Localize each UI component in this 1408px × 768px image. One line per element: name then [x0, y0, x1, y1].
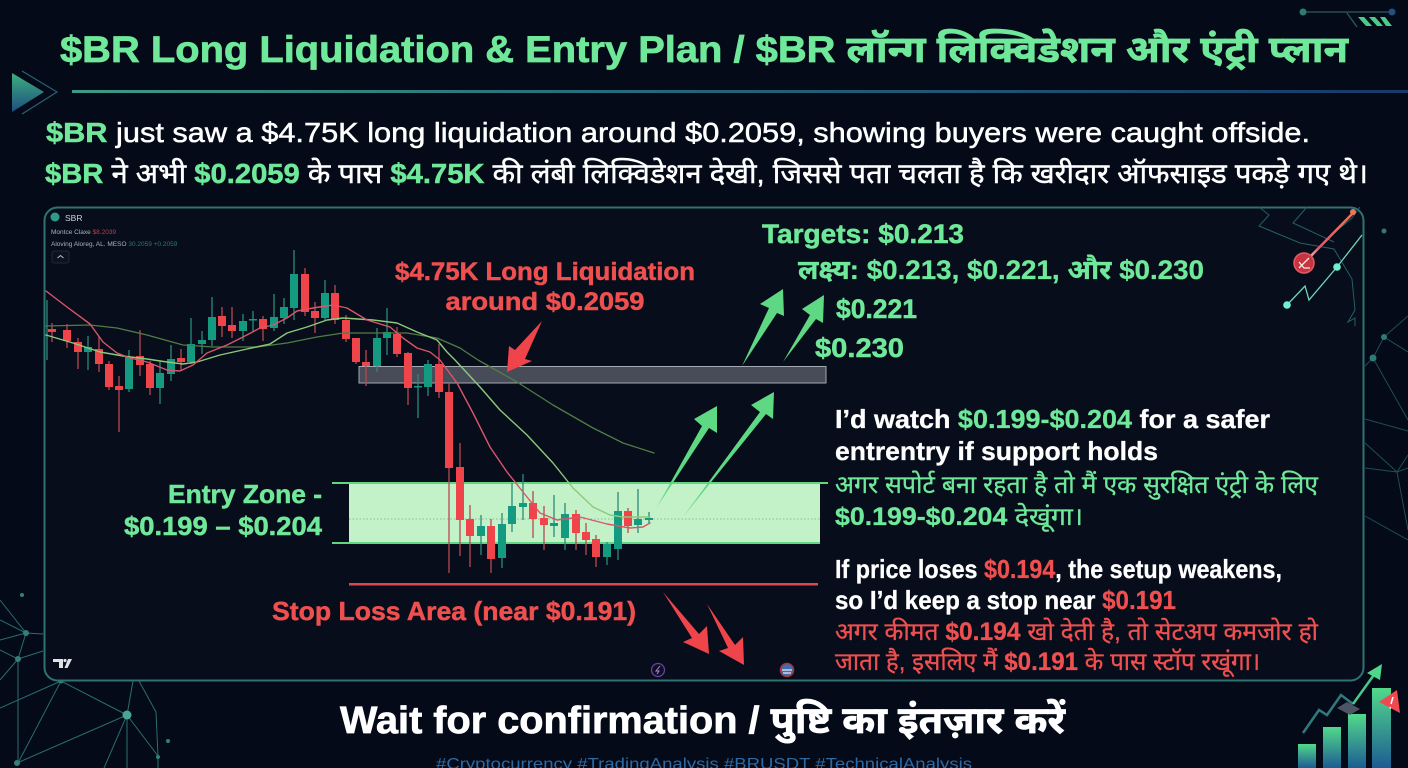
- text block: entry plan: $0.199-$0.204 देखूंगा।: [835, 501, 1083, 532]
- panel: chart: [44, 207, 1364, 680]
- intro text English: $BR just saw a $4.75K long liquidation around $0.2059, showing buyers were caught offside.: [46, 117, 1310, 148]
- moving average lines: [46, 291, 654, 528]
- icon: growth bars: [1298, 664, 1400, 768]
- intro text Hindi: $BR ने अभी $0.2059 के पास $4.75K की लंबी लिक्विडेशन देखी, जिससे पता चलता है कि खरीदार ऑफसाइड पकड़े गए थे।: [45, 157, 1368, 189]
- label: stop loss: Stop Loss Area (near $0.191): [272, 596, 636, 626]
- footer callout: Wait for confirmation / पुष्टि का इंतज़ार करें: [340, 698, 1066, 744]
- label: targets: [762, 219, 1204, 363]
- header decoration top right: [1300, 8, 1396, 27]
- background network bottom left: [0, 593, 170, 768]
- label: targets: $0.221: [836, 294, 917, 324]
- icon: panel corner signal: [1283, 209, 1362, 309]
- icon: flag badge: [780, 664, 794, 676]
- header decoration left triangles: [12, 71, 57, 114]
- arrows: upper target arrows: [742, 289, 824, 366]
- text block: entry plan: I’d watch $0.199-$0.204 for a safer: [835, 404, 1270, 434]
- header rule: [72, 90, 1408, 93]
- text block: stop plan: [835, 554, 1319, 677]
- liquidation band: [359, 366, 826, 383]
- label: targets: लक्ष्य: $0.213, $0.221, और $0.230: [798, 255, 1204, 285]
- icon: purple lightning badge: [652, 664, 664, 676]
- candlesticks: [47, 250, 649, 573]
- text block: entry plan: entrentry if support holds: [835, 436, 1158, 466]
- text block: stop plan: so I’d keep a stop near $0.191: [835, 585, 1176, 615]
- label: targets: $0.230: [815, 333, 904, 363]
- icon: tradingview logo: [53, 659, 72, 668]
- label: entry zone: [124, 479, 323, 541]
- text block: stop plan: अगर कीमत $0.194 खो देती है, तो सेटअप कमजोर हो: [835, 616, 1319, 646]
- label: entry zone: Entry Zone -: [168, 479, 322, 509]
- icon: chart header: [50, 212, 178, 263]
- title: $BR Long Liquidation & Entry Plan / $BR लॉन्ग लिक्विडेशन और एंट्री प्लान: [60, 28, 1349, 71]
- label: liquidation callout: around $0.2059: [446, 288, 644, 316]
- background network right side: [1365, 228, 1408, 540]
- label: entry zone: $0.199 – $0.204: [124, 511, 323, 541]
- arrows: stop loss arrows: [663, 592, 744, 665]
- text block: stop plan: If price loses $0.194, the setup weakens,: [835, 554, 1282, 584]
- text block: entry plan: [835, 404, 1319, 532]
- text block: entry plan: अगर सपोर्ट बना रहता है तो मैं एक सुरक्षित एंट्री के लिए: [835, 469, 1319, 500]
- stop loss line: [349, 583, 818, 586]
- arrow: liquidation pointer: [507, 321, 542, 372]
- label: liquidation callout: [395, 258, 695, 316]
- icon: chart header: Aloving Aloreg, AL. MESO 30.2059 +0.2059: [51, 241, 178, 248]
- text block: stop plan: जाता है, इसलिए मैं $0.191 के पास स्टॉप रखूंगा।: [835, 646, 1260, 677]
- label: liquidation callout: $4.75K Long Liquidation: [395, 258, 695, 286]
- label: targets: Targets: $0.213: [762, 219, 964, 249]
- icon: chart header: SBR: [65, 213, 82, 223]
- icon: chart header: Montce Claxe $8.2039: [51, 229, 116, 236]
- entry zone band: [332, 483, 828, 543]
- panel corner network: [1259, 207, 1360, 326]
- arrows: lower target arrows: [657, 392, 774, 517]
